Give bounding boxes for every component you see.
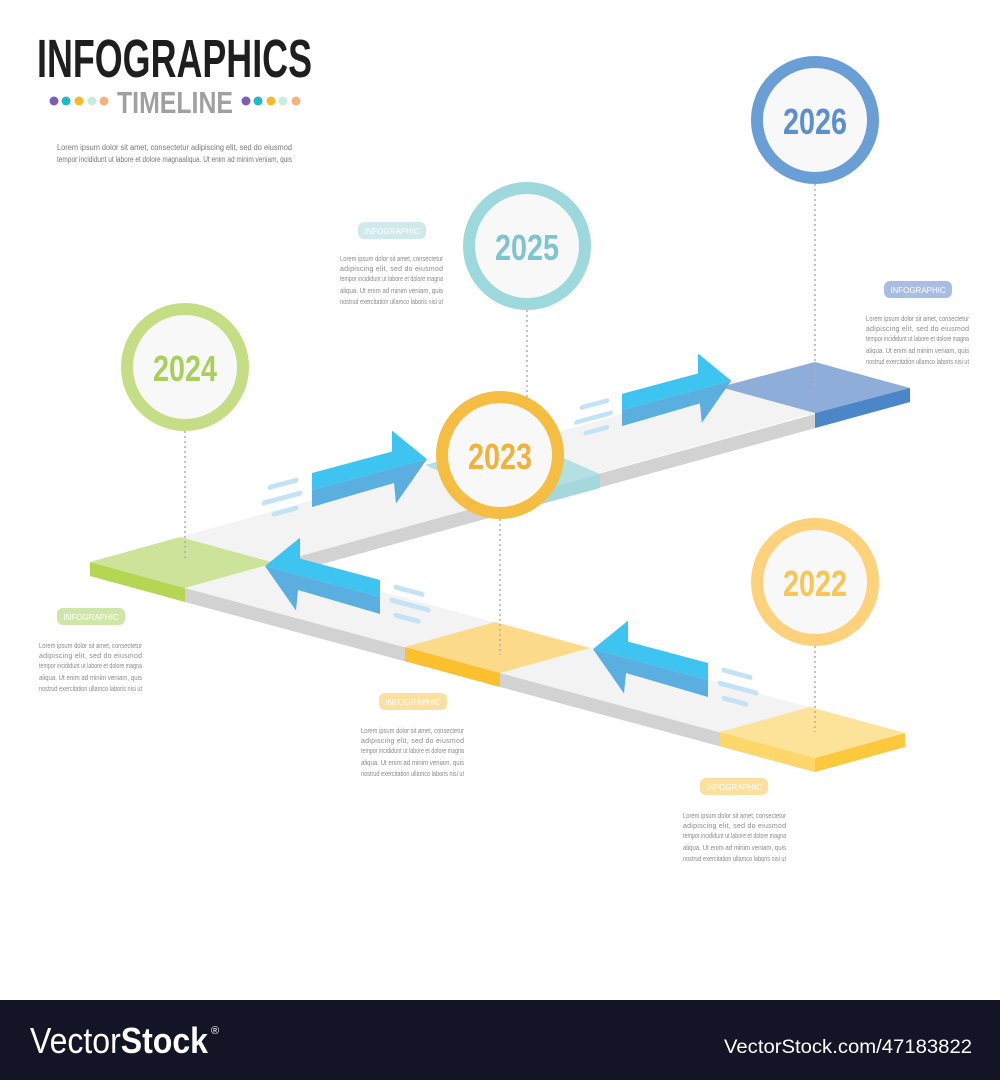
title: INFOGRAPHICS: [37, 29, 312, 89]
circle 2023: [442, 397, 558, 513]
label 2022: nostrud exercitation ullamco laboris nisi ut: [683, 854, 787, 863]
circle 2024: [127, 309, 243, 425]
label 2023: INFOGRAPHIC: [385, 698, 441, 707]
label 2026: aliqua. Ut enim ad minim veniam, quis: [866, 346, 969, 355]
label 2026: INFOGRAPHIC: [890, 286, 946, 295]
circle 2025: [469, 188, 585, 304]
isometric path: [90, 362, 910, 772]
circle 2026: 2026: [783, 101, 847, 142]
block 2025 teal: [425, 439, 600, 500]
label 2024: INFOGRAPHIC: [63, 613, 119, 622]
intro paragraph: tempor incididunt ut labore et dolore magnaaliqua. Ut enim ad minim veniam, quis: [57, 155, 292, 164]
label 2024: aliqua. Ut enim ad minim veniam, quis: [39, 673, 142, 682]
label 2023: nostrud exercitation ullamco laboris nisi ut: [361, 769, 465, 778]
circle 2026: [757, 62, 873, 178]
label 2022: [683, 778, 787, 863]
title: [37, 29, 312, 120]
intro paragraph: Lorem ipsum dolor sit amet, consectetur adipiscing elit, sed do eiusmod: [57, 143, 292, 152]
label 2022: aliqua. Ut enim ad minim veniam, quis: [683, 843, 786, 852]
label 2023: aliqua. Ut enim ad minim veniam, quis: [361, 758, 464, 767]
label 2022: adipiscing elit, sed do eiusmod: [683, 823, 786, 830]
label 2025: aliqua. Ut enim ad minim veniam, quis: [340, 286, 443, 295]
label 2026: adipiscing elit, sed do eiusmod: [866, 326, 969, 333]
label 2025: Lorem ipsum dolor sit amet, consectetur: [340, 254, 443, 263]
circle 2022: 2022: [783, 563, 847, 604]
label 2025: adipiscing elit, sed do eiusmod: [340, 266, 443, 273]
label 2025: nostrud exercitation ullamco laboris nisi ut: [340, 297, 444, 306]
intro paragraph: [57, 143, 292, 164]
footer bar: ®: [211, 1025, 219, 1037]
label 2022: INFOGRAPHIC: [706, 783, 762, 792]
footer bar: [0, 1000, 1000, 1080]
lower strip: [185, 563, 905, 772]
footer bar: VectorStock: [30, 1020, 209, 1061]
label 2023: [361, 693, 465, 778]
arrow 1: [264, 421, 427, 539]
block 2023 yellow: [405, 622, 590, 673]
label 2024: [39, 608, 143, 693]
decorative dots: [50, 96, 300, 106]
label 2025: INFOGRAPHIC: [364, 227, 420, 236]
label 2025: [340, 222, 444, 306]
footer bar: VectorStock.com/47183822: [724, 1037, 972, 1058]
subtitle: timeline: TIMELINE: [117, 85, 233, 120]
label 2024: tempor incididunt ut labore et dolore magna: [39, 661, 143, 670]
label 2023: Lorem ipsum dolor sit amet, consectetur: [361, 726, 464, 735]
block 2022 yellow: [720, 707, 905, 758]
label 2026: Lorem ipsum dolor sit amet, consectetur: [866, 314, 969, 323]
label 2024: nostrud exercitation ullamco laboris nisi ut: [39, 684, 143, 693]
label 2025: tempor incididunt ut labore et dolore magna: [340, 274, 444, 283]
arrow 4: [593, 611, 756, 729]
label 2022: tempor incididunt ut labore et dolore magna: [683, 831, 787, 840]
circle 2022: [757, 524, 873, 640]
green block 2024: [90, 537, 275, 602]
block 2026 blue: [720, 362, 910, 413]
label 2024: Lorem ipsum dolor sit amet, consectetur: [39, 641, 142, 650]
arrow 3: [265, 528, 428, 646]
label 2022: Lorem ipsum dolor sit amet, consectetur: [683, 811, 786, 820]
label 2023: tempor incididunt ut labore et dolore magna: [361, 746, 465, 755]
circle 2023: 2023: [468, 436, 532, 477]
upper strip: [180, 362, 910, 577]
label 2026: [866, 281, 970, 366]
label 2023: adipiscing elit, sed do eiusmod: [361, 738, 464, 745]
circle 2025: 2025: [495, 227, 559, 268]
arrow 2: [576, 345, 731, 456]
circle 2024: 2024: [153, 348, 217, 389]
dotted connectors: [185, 184, 815, 732]
label 2024: adipiscing elit, sed do eiusmod: [39, 653, 142, 660]
